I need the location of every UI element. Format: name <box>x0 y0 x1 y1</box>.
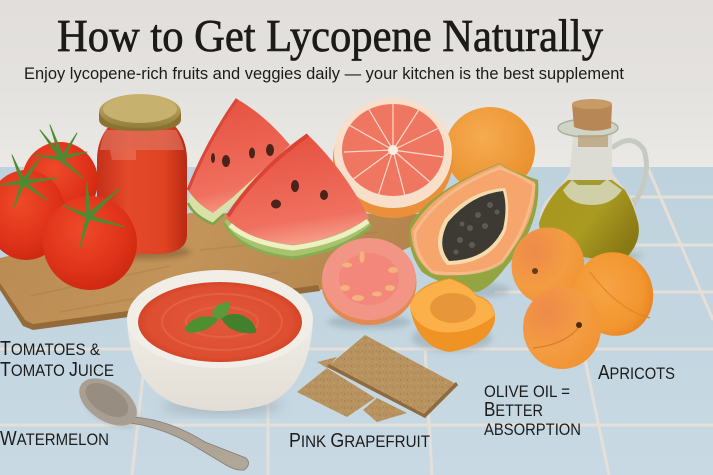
icon: left tomato <box>0 155 66 260</box>
icon: front tomato <box>43 182 137 290</box>
label: apricots: APRICOTS <box>598 362 675 384</box>
icon: crackers <box>297 335 458 422</box>
icon: back tomato <box>22 125 98 220</box>
icon: basil leaves <box>185 302 256 333</box>
cutting board <box>0 213 420 330</box>
icon: olive oil bottle <box>539 99 646 261</box>
label: olive oil better absorption: BETTER <box>484 399 543 421</box>
icon: whole orange <box>445 107 535 193</box>
icon: spoon <box>71 369 249 470</box>
icon: jar of tomato juice <box>97 94 191 259</box>
tiled countertop <box>0 167 713 475</box>
icon: pink grapefruit half <box>333 98 453 218</box>
subtitle: Enjoy lycopene-rich fruits and veggies daily — your kitchen is the best supplement <box>24 64 624 83</box>
icon: watermelon wedge back <box>188 99 290 224</box>
label: pink grapefruit: PINK GRAPEFRUIT <box>289 430 430 452</box>
icon: white bowl of tomato puree <box>127 270 313 414</box>
icon: guava half <box>322 238 416 329</box>
label: olive oil better absorption <box>484 382 581 439</box>
background wall <box>0 0 713 170</box>
label: tomatoes and tomato juice: TOMATO JUICE <box>0 359 114 381</box>
icon: papaya half <box>409 163 538 298</box>
icon: apricot right <box>565 243 663 345</box>
title: How to Get Lycopene Naturally <box>57 10 603 61</box>
icon: halved apricot <box>410 278 495 352</box>
label: olive oil better absorption: OLIVE OIL = <box>484 382 570 401</box>
icon: apricot upper <box>512 228 584 304</box>
label: tomatoes and tomato juice <box>0 338 114 381</box>
label: olive oil better absorption: ABSORPTION <box>484 420 581 439</box>
icon: watermelon wedge front <box>224 135 371 258</box>
label: watermelon: WATERMELON <box>0 428 109 450</box>
label: tomatoes and tomato juice: TOMATOES & <box>0 338 101 360</box>
icon: apricot front <box>523 287 601 369</box>
